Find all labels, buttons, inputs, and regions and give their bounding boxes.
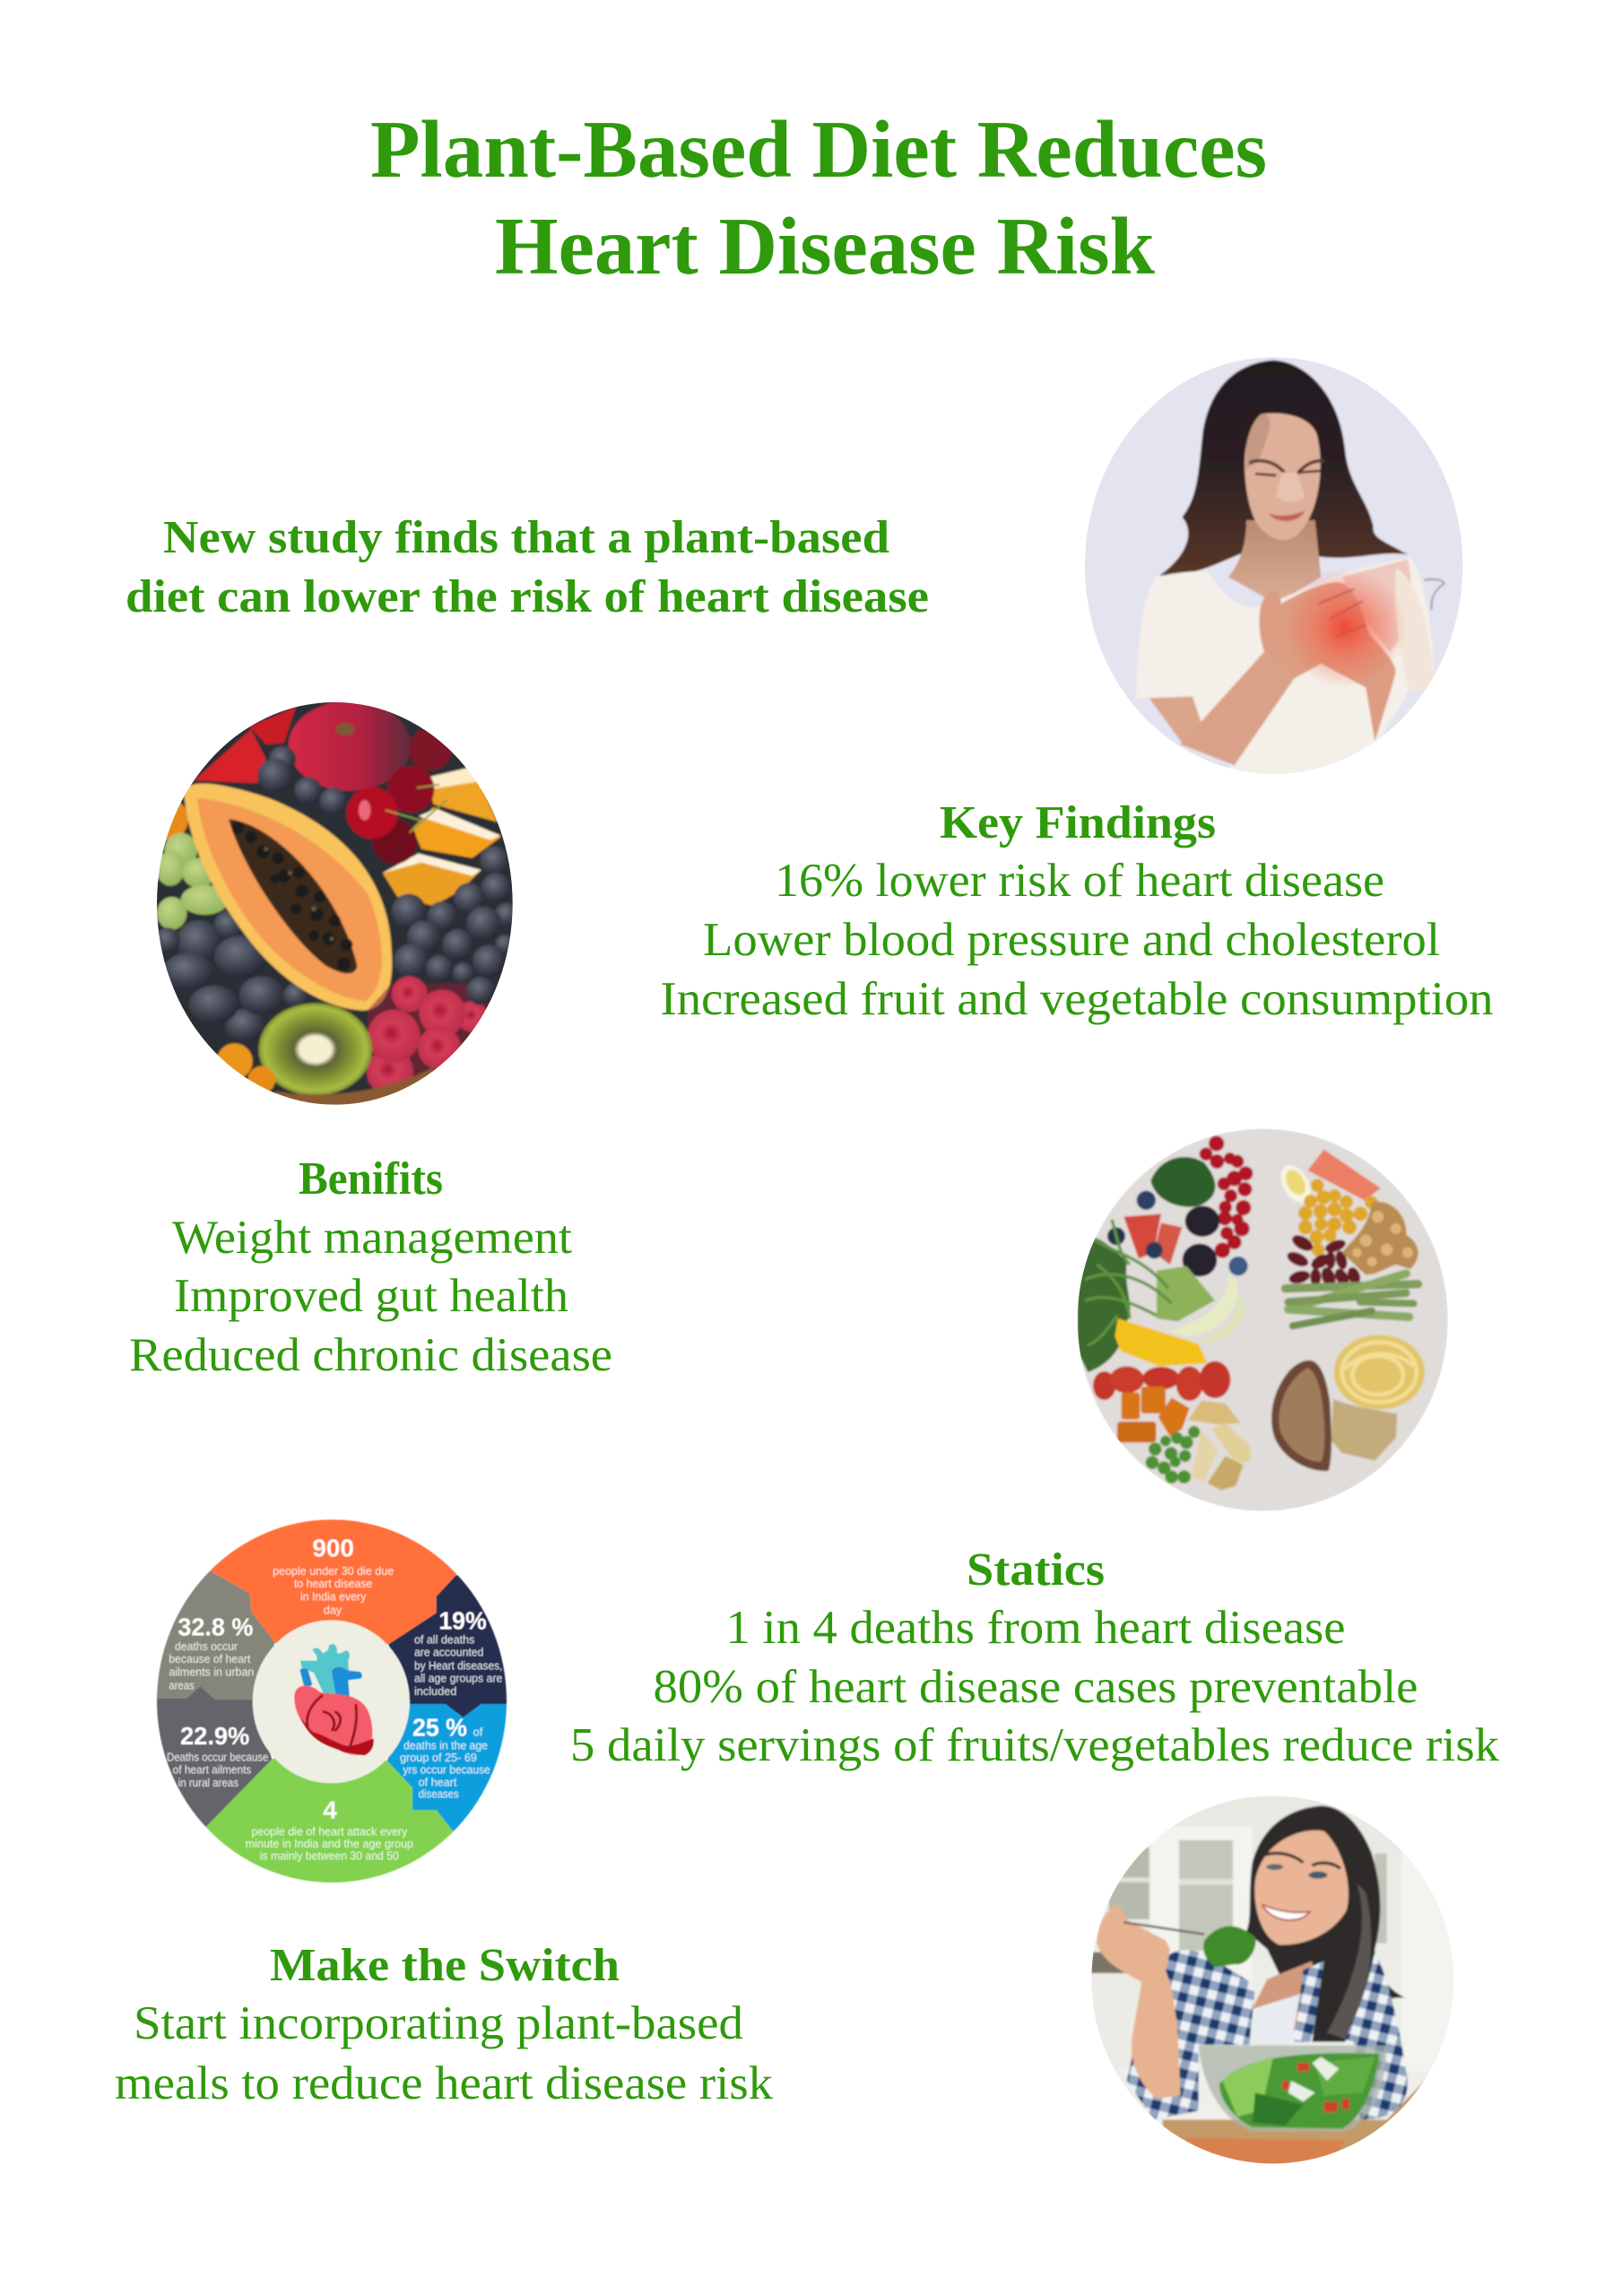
key findings text block: Increased fruit and vegetable consumption xyxy=(660,973,1494,1025)
infographic canvas xyxy=(116,120,1499,2163)
icon: anatomical heart xyxy=(294,1644,374,1755)
stat: 4 xyxy=(246,1796,413,1862)
segment: 32.8% olive grey xyxy=(156,1570,276,1700)
photo: woman with chest pain xyxy=(1085,357,1463,774)
stat: 25%: of xyxy=(473,1726,483,1739)
stat: 32.8% xyxy=(169,1613,254,1692)
stat: 32.8%: ailments in urban xyxy=(169,1666,254,1679)
stat: 900: day xyxy=(324,1604,343,1616)
stat: 32.8%: deaths occur xyxy=(175,1640,238,1653)
key findings text block: Lower blood pressure and cholesterol xyxy=(703,914,1440,966)
stat: 22.9%: Deaths occur because xyxy=(167,1751,268,1763)
segment: 22.9% grey xyxy=(156,1686,273,1828)
photo: woman eating salad xyxy=(1091,1796,1454,2163)
benefits text block: Reduced chronic disease xyxy=(129,1329,612,1381)
stat: 4: is mainly between 30 and 50 xyxy=(260,1849,399,1862)
benefits text block xyxy=(129,1153,612,1381)
stat: 19% xyxy=(414,1607,502,1698)
segment: 19% navy xyxy=(387,1574,507,1718)
stat: 25%: of heart xyxy=(419,1776,457,1788)
statistics text block: 80% of heart disease cases preventable xyxy=(653,1661,1418,1713)
stat: 900: 900 xyxy=(312,1534,354,1561)
stat: 32.8%: because of heart xyxy=(169,1653,251,1665)
subtitle text block: diet can lower the risk of heart disease xyxy=(126,571,929,622)
statistics text block: 5 daily servings of fruits/vegetables reduce risk xyxy=(570,1719,1500,1771)
title xyxy=(370,104,1267,291)
stat: 25%: yrs occur because xyxy=(403,1763,490,1776)
center disc xyxy=(253,1620,410,1783)
stat: 25%: group of 25- 69 xyxy=(400,1752,477,1764)
subtitle text block: New study finds that a plant-based xyxy=(163,512,889,563)
stat: 19%: 19% xyxy=(438,1607,487,1635)
segment: 25% blue xyxy=(387,1704,520,1877)
stat: 22.9%: in rural areas xyxy=(178,1777,239,1789)
stat: 25%: diseases xyxy=(419,1788,459,1801)
title: Plant-Based Diet Reduces xyxy=(370,104,1267,195)
key findings text block: 16% lower risk of heart disease xyxy=(775,855,1384,907)
stat: 900: in India every xyxy=(300,1591,367,1604)
stat: 25%: deaths in the age xyxy=(403,1739,488,1752)
make the switch text block xyxy=(115,1940,774,2109)
stat: 19%: are accounted xyxy=(414,1646,483,1658)
segment: 900 orange xyxy=(210,1519,457,1645)
stat: 19%: included xyxy=(414,1685,456,1698)
photo: mixed fruit xyxy=(146,693,523,1112)
stat: 32.8%: areas xyxy=(169,1679,195,1692)
benefits text block: Benifits xyxy=(299,1153,443,1205)
segment: 4 green xyxy=(205,1758,454,1883)
make the switch text block: Make the Switch xyxy=(270,1940,620,1991)
stat: 900 xyxy=(273,1534,394,1616)
title: Heart Disease Risk xyxy=(495,201,1155,291)
stat: 19%: by Heart diseases, xyxy=(414,1659,502,1672)
benefits text block: Improved gut health xyxy=(174,1270,568,1322)
stat: 19%: of all deaths xyxy=(414,1633,474,1646)
key findings text block xyxy=(660,797,1494,1025)
make the switch text block: meals to reduce heart disease risk xyxy=(115,2057,774,2109)
subtitle text block xyxy=(126,512,929,622)
stat: 900: people under 30 die due xyxy=(273,1565,394,1578)
stat: 22.9%: of heart ailments xyxy=(173,1763,251,1776)
stat: 22.9% xyxy=(167,1722,268,1789)
stat: 22.9%: 22.9% xyxy=(180,1722,249,1750)
stat: 4: minute in India and the age group xyxy=(246,1838,413,1850)
pie-style infographic: heart statistics xyxy=(156,1519,507,1883)
statistics text block xyxy=(570,1544,1500,1771)
make the switch text block: Start incorporating plant-based xyxy=(134,1997,743,2049)
statistics text block: Statics xyxy=(967,1544,1105,1596)
benefits text block: Weight management xyxy=(172,1212,572,1264)
key findings text block: Key Findings xyxy=(940,797,1216,848)
stat: 900: to heart disease xyxy=(294,1578,372,1590)
stat: 32.8%: 32.8 % xyxy=(178,1613,253,1640)
statistics text block: 1 in 4 deaths from heart disease xyxy=(726,1602,1345,1654)
stat: 4: people die of heart attack every xyxy=(251,1826,408,1839)
photo: healthy plate xyxy=(1078,1128,1448,1511)
stat: 25%: 25 % xyxy=(412,1714,467,1742)
stat: 25% xyxy=(400,1714,490,1801)
stat: 4: 4 xyxy=(323,1796,337,1823)
stat: 19%: all age groups are xyxy=(414,1673,502,1685)
